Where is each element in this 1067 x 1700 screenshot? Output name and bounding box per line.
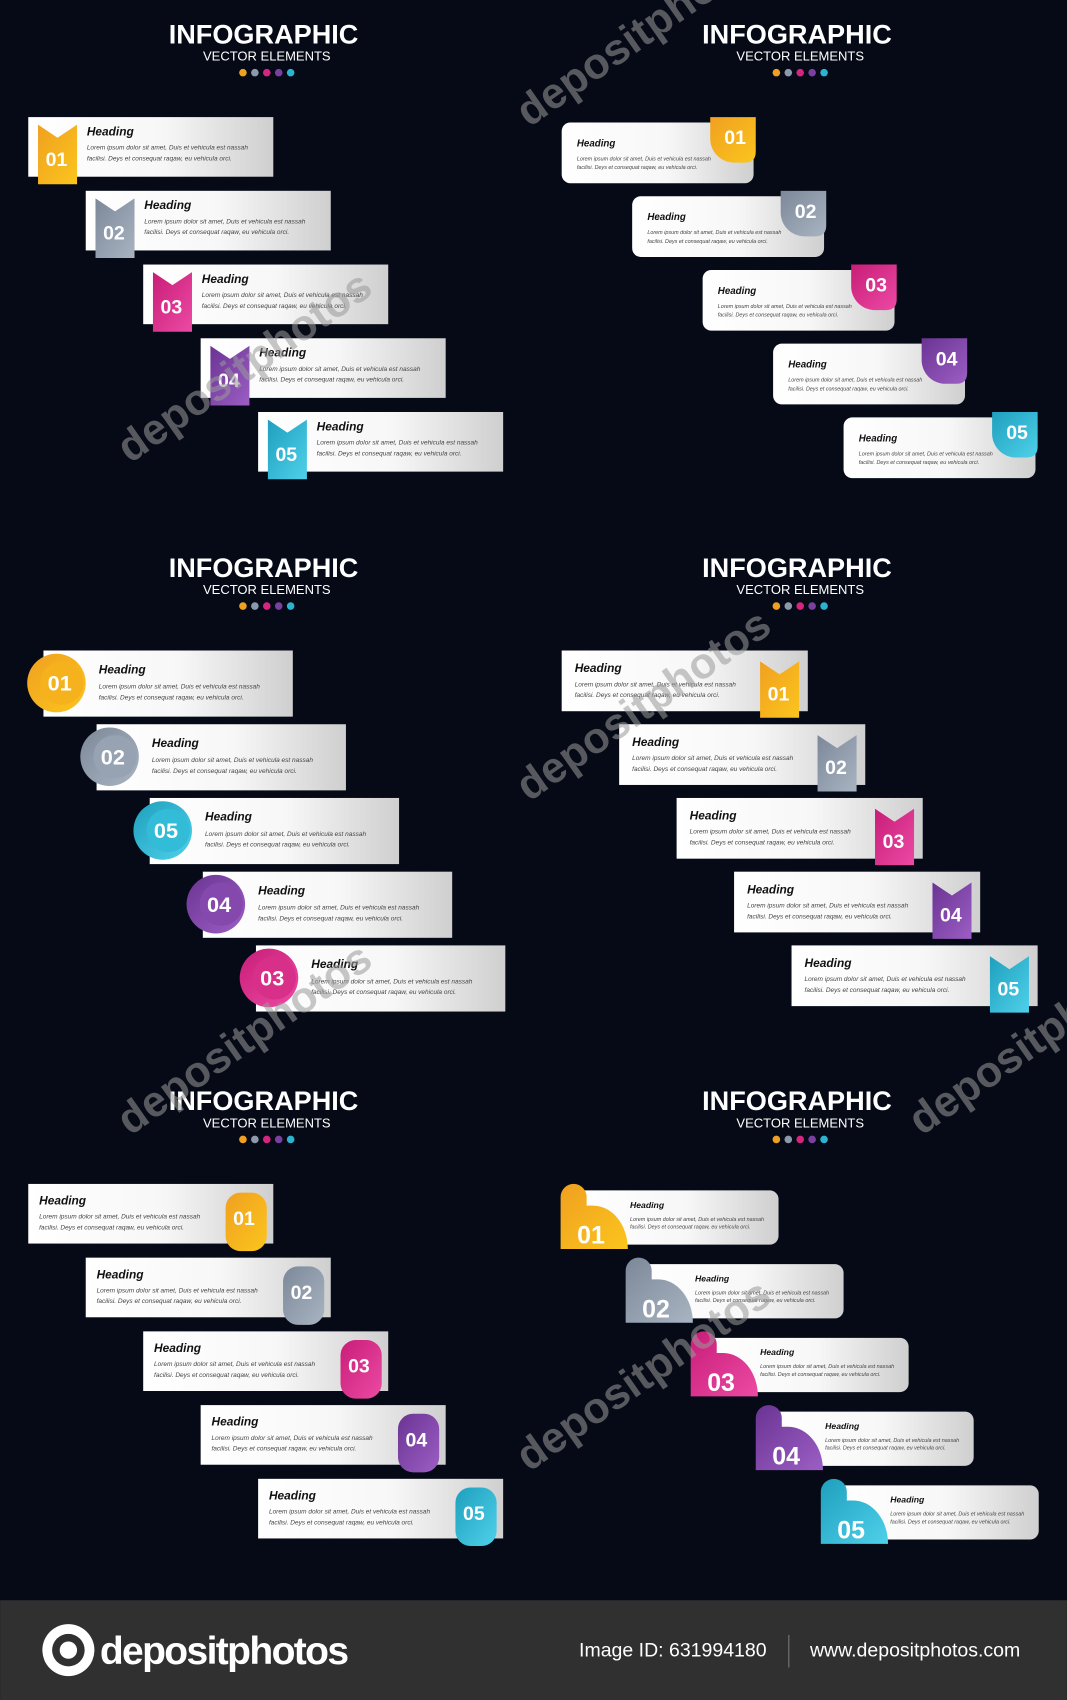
card 04: facilisi. Deys et consequat raqaw, eu vehicula orci. [788,386,909,392]
card 05: Lorem ipsum dolor sit amet, Duis et vehicula est nassah [890,1512,1024,1518]
card 05 [258,412,503,479]
card 02 [626,1258,844,1323]
card 01: facilisi. Deys et consequat raqaw, eu vehicula orci. [575,692,720,699]
card 03: Lorem ipsum dolor sit amet, Duis et vehicula est nassah [202,292,363,299]
card 03: facilisi. Deys et consequat raqaw, eu vehicula orci. [311,989,456,996]
card 04: 04 [940,905,962,927]
card 03: facilisi. Deys et consequat raqaw, eu vehicula orci. [760,1372,881,1378]
card 04: Lorem ipsum dolor sit amet, Duis et vehicula est nassah [788,378,922,384]
card 01: Heading [87,125,135,139]
watermarks: depositphotos [108,934,381,1144]
card 04 [201,1405,446,1472]
card 04: Lorem ipsum dolor sit amet, Duis et vehicula est nassah [259,366,421,373]
card 05: Lorem ipsum dolor sit amet, Duis et vehicula est nassah [317,440,478,447]
card 05: Lorem ipsum dolor sit amet, Duis et vehicula est nassah [269,1509,430,1516]
card 02: Lorem ipsum dolor sit amet, Duis et vehicula est nassah [144,218,306,225]
card 03 [677,798,923,865]
card 02: facilisi. Deys et consequat raqaw, eu vehicula orci. [97,1298,242,1305]
card 03: Lorem ipsum dolor sit amet, Duis et vehicula est nassah [690,829,851,836]
card 02: 02 [795,201,817,223]
card 04 [187,872,452,938]
watermarks: depositphotos [507,1270,780,1481]
card 05 [821,1479,1039,1544]
card 03: Lorem ipsum dolor sit amet, Duis et vehicula est nassah [311,978,473,985]
card 04: Heading [747,882,795,896]
card 01: Lorem ipsum dolor sit amet, Duis et vehicula est nassah [87,145,248,152]
card 03: 03 [707,1369,735,1397]
card 04: facilisi. Deys et consequat raqaw, eu vehicula orci. [747,913,892,920]
card 05 [844,412,1038,478]
title: VECTOR ELEMENTS [203,582,331,597]
card 01: 01 [724,127,746,149]
card 02: Lorem ipsum dolor sit amet, Duis et vehicula est nassah [97,1287,258,1294]
card 03: Lorem ipsum dolor sit amet, Duis et vehicula est nassah [154,1361,316,1368]
panel: middle-left circles [27,552,505,1012]
card 02: facilisi. Deys et consequat raqaw, eu vehicula orci. [695,1298,816,1304]
card 04: Heading [259,346,307,360]
card 04: 04 [772,1443,800,1471]
footer [0,1600,1067,1700]
title: INFOGRAPHIC [702,552,892,583]
card 05: facilisi. Deys et consequat raqaw, eu vehicula orci. [890,1519,1011,1525]
card 03: Heading [154,1341,202,1355]
panel: bottom-left rounded badges [28,1085,503,1546]
card 01 [561,1184,779,1250]
card 02 [80,724,346,790]
card 04: 04 [406,1429,427,1451]
card 03: Heading [690,809,737,823]
card 01 [28,117,273,184]
card 02: 02 [291,1282,312,1304]
card 05: facilisi. Deys et consequat raqaw, eu vehicula orci. [205,842,350,849]
panel: top-right corner badges [562,18,1038,478]
title: VECTOR ELEMENTS [736,1116,864,1131]
url: www.depositphotos.com [809,1640,1020,1662]
card 03: facilisi. Deys et consequat raqaw, eu vehicula orci. [154,1372,299,1379]
card 01: facilisi. Deys et consequat raqaw, eu vehicula orci. [87,155,232,162]
card 03 [240,945,505,1012]
card 02: Heading [144,198,192,212]
card 03: Heading [760,1347,795,1357]
panel: bottom-right curled badges [561,1085,1039,1544]
card 04: Lorem ipsum dolor sit amet, Duis et vehicula est nassah [825,1438,959,1444]
card 03 [703,265,897,331]
title: VECTOR ELEMENTS [736,582,864,597]
title [169,18,358,76]
card 01: Lorem ipsum dolor sit amet, Duis et vehicula est nassah [575,681,736,688]
card 01: Lorem ipsum dolor sit amet, Duis et vehicula est nassah [630,1217,764,1223]
card 04: facilisi. Deys et consequat raqaw, eu vehicula orci. [259,377,404,384]
card 02: 02 [101,744,125,769]
card 03: Heading [202,272,249,286]
card 04: 04 [936,348,958,370]
card 05: facilisi. Deys et consequat raqaw, eu vehicula orci. [859,460,979,466]
card 02: Heading [647,212,686,223]
card 01 [28,1184,273,1251]
card 05: Heading [859,433,897,444]
card 01: Heading [577,138,615,149]
card 03: 03 [348,1356,370,1378]
card 05 [792,945,1038,1013]
card 03: Lorem ipsum dolor sit amet, Duis et vehicula est nassah [760,1364,894,1370]
card 05: Lorem ipsum dolor sit amet, Duis et vehicula est nassah [859,451,993,457]
card 03: Heading [718,286,756,297]
card 02 [86,191,331,258]
card 01: Heading [39,1194,87,1208]
card 04 [734,872,980,939]
title: INFOGRAPHIC [169,18,358,49]
card 01 [562,651,808,718]
card 02: Lorem ipsum dolor sit amet, Duis et vehicula est nassah [647,230,781,236]
card 04: Heading [211,1415,259,1429]
title: INFOGRAPHIC [169,1085,358,1116]
image id: Image ID: 631994180 [579,1640,767,1662]
card 03: facilisi. Deys et consequat raqaw, eu vehicula orci. [202,303,347,310]
card 02: 02 [103,223,125,245]
title: INFOGRAPHIC [702,18,892,49]
card 02: 02 [642,1295,670,1323]
logo [42,1624,348,1676]
card 05: Heading [317,419,364,433]
card 05: 05 [1006,422,1028,444]
card 03: Heading [311,957,359,971]
card 01: 01 [46,149,67,171]
card 02: Heading [632,735,680,749]
title [702,552,892,610]
card 05: Heading [890,1495,925,1505]
card 05: facilisi. Deys et consequat raqaw, eu vehicula orci. [805,987,950,994]
card 02: Heading [695,1274,730,1284]
card 05: facilisi. Deys et consequat raqaw, eu vehicula orci. [317,450,462,457]
card 03: 03 [865,275,887,297]
card 02: Lorem ipsum dolor sit amet, Duis et vehicula est nassah [695,1291,829,1297]
card 04: facilisi. Deys et consequat raqaw, eu vehicula orci. [211,1446,357,1453]
card 02: facilisi. Deys et consequat raqaw, eu vehicula orci. [152,768,297,775]
watermarks: depositphotos [108,262,381,472]
card 01: Heading [575,661,622,675]
card 02: Lorem ipsum dolor sit amet, Duis et vehicula est nassah [152,757,313,764]
card 01: Lorem ipsum dolor sit amet, Duis et vehicula est nassah [39,1214,201,1221]
card 02: Heading [97,1267,144,1281]
card 02 [86,1258,331,1325]
card 05: Heading [269,1488,317,1502]
card 01: facilisi. Deys et consequat raqaw, eu vehicula orci. [630,1224,750,1230]
card 05: Heading [205,810,253,824]
card 04: 04 [218,370,240,392]
card 04: facilisi. Deys et consequat raqaw, eu vehicula orci. [258,915,403,922]
card 03: 03 [161,296,182,318]
card 05: 05 [998,978,1019,1000]
card 02: Heading [152,736,200,750]
title: INFOGRAPHIC [702,1085,892,1116]
card 03: facilisi. Deys et consequat raqaw, eu vehicula orci. [690,840,835,847]
card 04: Heading [258,883,306,897]
card 05: facilisi. Deys et consequat raqaw, eu vehicula orci. [269,1519,414,1526]
card 05: 05 [154,818,178,843]
card 05: 05 [463,1503,485,1525]
card 05: 05 [275,444,297,466]
card 01: 01 [768,683,790,705]
card 04 [756,1405,974,1471]
panel: top-left ribbon tabs [28,18,503,479]
card 04: Heading [788,360,827,371]
watermarks: depositphotos [507,600,780,810]
card 03: 03 [260,966,284,991]
card 02: facilisi. Deys et consequat raqaw, eu vehicula orci. [632,766,777,773]
card 04: Lorem ipsum dolor sit amet, Duis et vehicula est nassah [258,905,420,912]
card 05: Lorem ipsum dolor sit amet, Duis et vehicula est nassah [205,831,367,838]
card 04: Heading [825,1421,860,1431]
logo: depositphotos [100,1630,348,1673]
card 03 [143,265,388,332]
card 03 [143,1331,388,1399]
card 01: 01 [233,1208,255,1230]
card 03: facilisi. Deys et consequat raqaw, eu vehicula orci. [718,313,838,319]
card 03: Lorem ipsum dolor sit amet, Duis et vehicula est nassah [718,304,852,310]
card 01: Lorem ipsum dolor sit amet, Duis et vehicula est nassah [577,156,711,162]
title [702,1085,892,1143]
card 05: 05 [837,1516,865,1544]
title: INFOGRAPHIC [169,552,358,583]
card 01 [562,117,756,183]
card 05 [133,798,399,864]
card 04: facilisi. Deys et consequat raqaw, eu vehicula orci. [825,1446,946,1452]
card 01: 01 [577,1222,605,1250]
title: VECTOR ELEMENTS [203,1116,331,1131]
card 03 [691,1331,909,1397]
card 04 [201,338,446,405]
card 02: 02 [825,757,847,779]
card 04 [773,338,967,404]
title: VECTOR ELEMENTS [736,49,864,64]
card 01 [27,651,293,717]
card 01: facilisi. Deys et consequat raqaw, eu vehicula orci. [99,694,244,701]
card 02 [619,724,865,791]
card 05: Heading [805,956,852,970]
card 01: Heading [630,1200,665,1210]
card 01: facilisi. Deys et consequat raqaw, eu vehicula orci. [577,165,697,171]
title [169,552,358,610]
card 01: 01 [48,671,72,696]
card 05: Lorem ipsum dolor sit amet, Duis et vehicula est nassah [805,976,966,983]
card 03: 03 [883,831,904,853]
panel: middle-right right tabs [562,552,1038,1013]
card 02: Lorem ipsum dolor sit amet, Duis et vehicula est nassah [632,755,794,762]
title [702,18,892,76]
card 04: Lorem ipsum dolor sit amet, Duis et vehicula est nassah [211,1435,373,1442]
watermarks [108,0,1067,1481]
card 01: facilisi. Deys et consequat raqaw, eu vehicula orci. [39,1224,184,1231]
card 02: facilisi. Deys et consequat raqaw, eu vehicula orci. [647,239,768,245]
card 01: Heading [99,662,146,676]
card 02 [632,191,826,257]
card 04: 04 [207,892,231,917]
title [169,1085,358,1143]
card 02: facilisi. Deys et consequat raqaw, eu vehicula orci. [144,229,289,236]
card 05 [258,1479,503,1546]
card 01: Lorem ipsum dolor sit amet, Duis et vehicula est nassah [99,683,260,690]
card 04: Lorem ipsum dolor sit amet, Duis et vehicula est nassah [747,902,909,909]
title: VECTOR ELEMENTS [203,49,331,64]
